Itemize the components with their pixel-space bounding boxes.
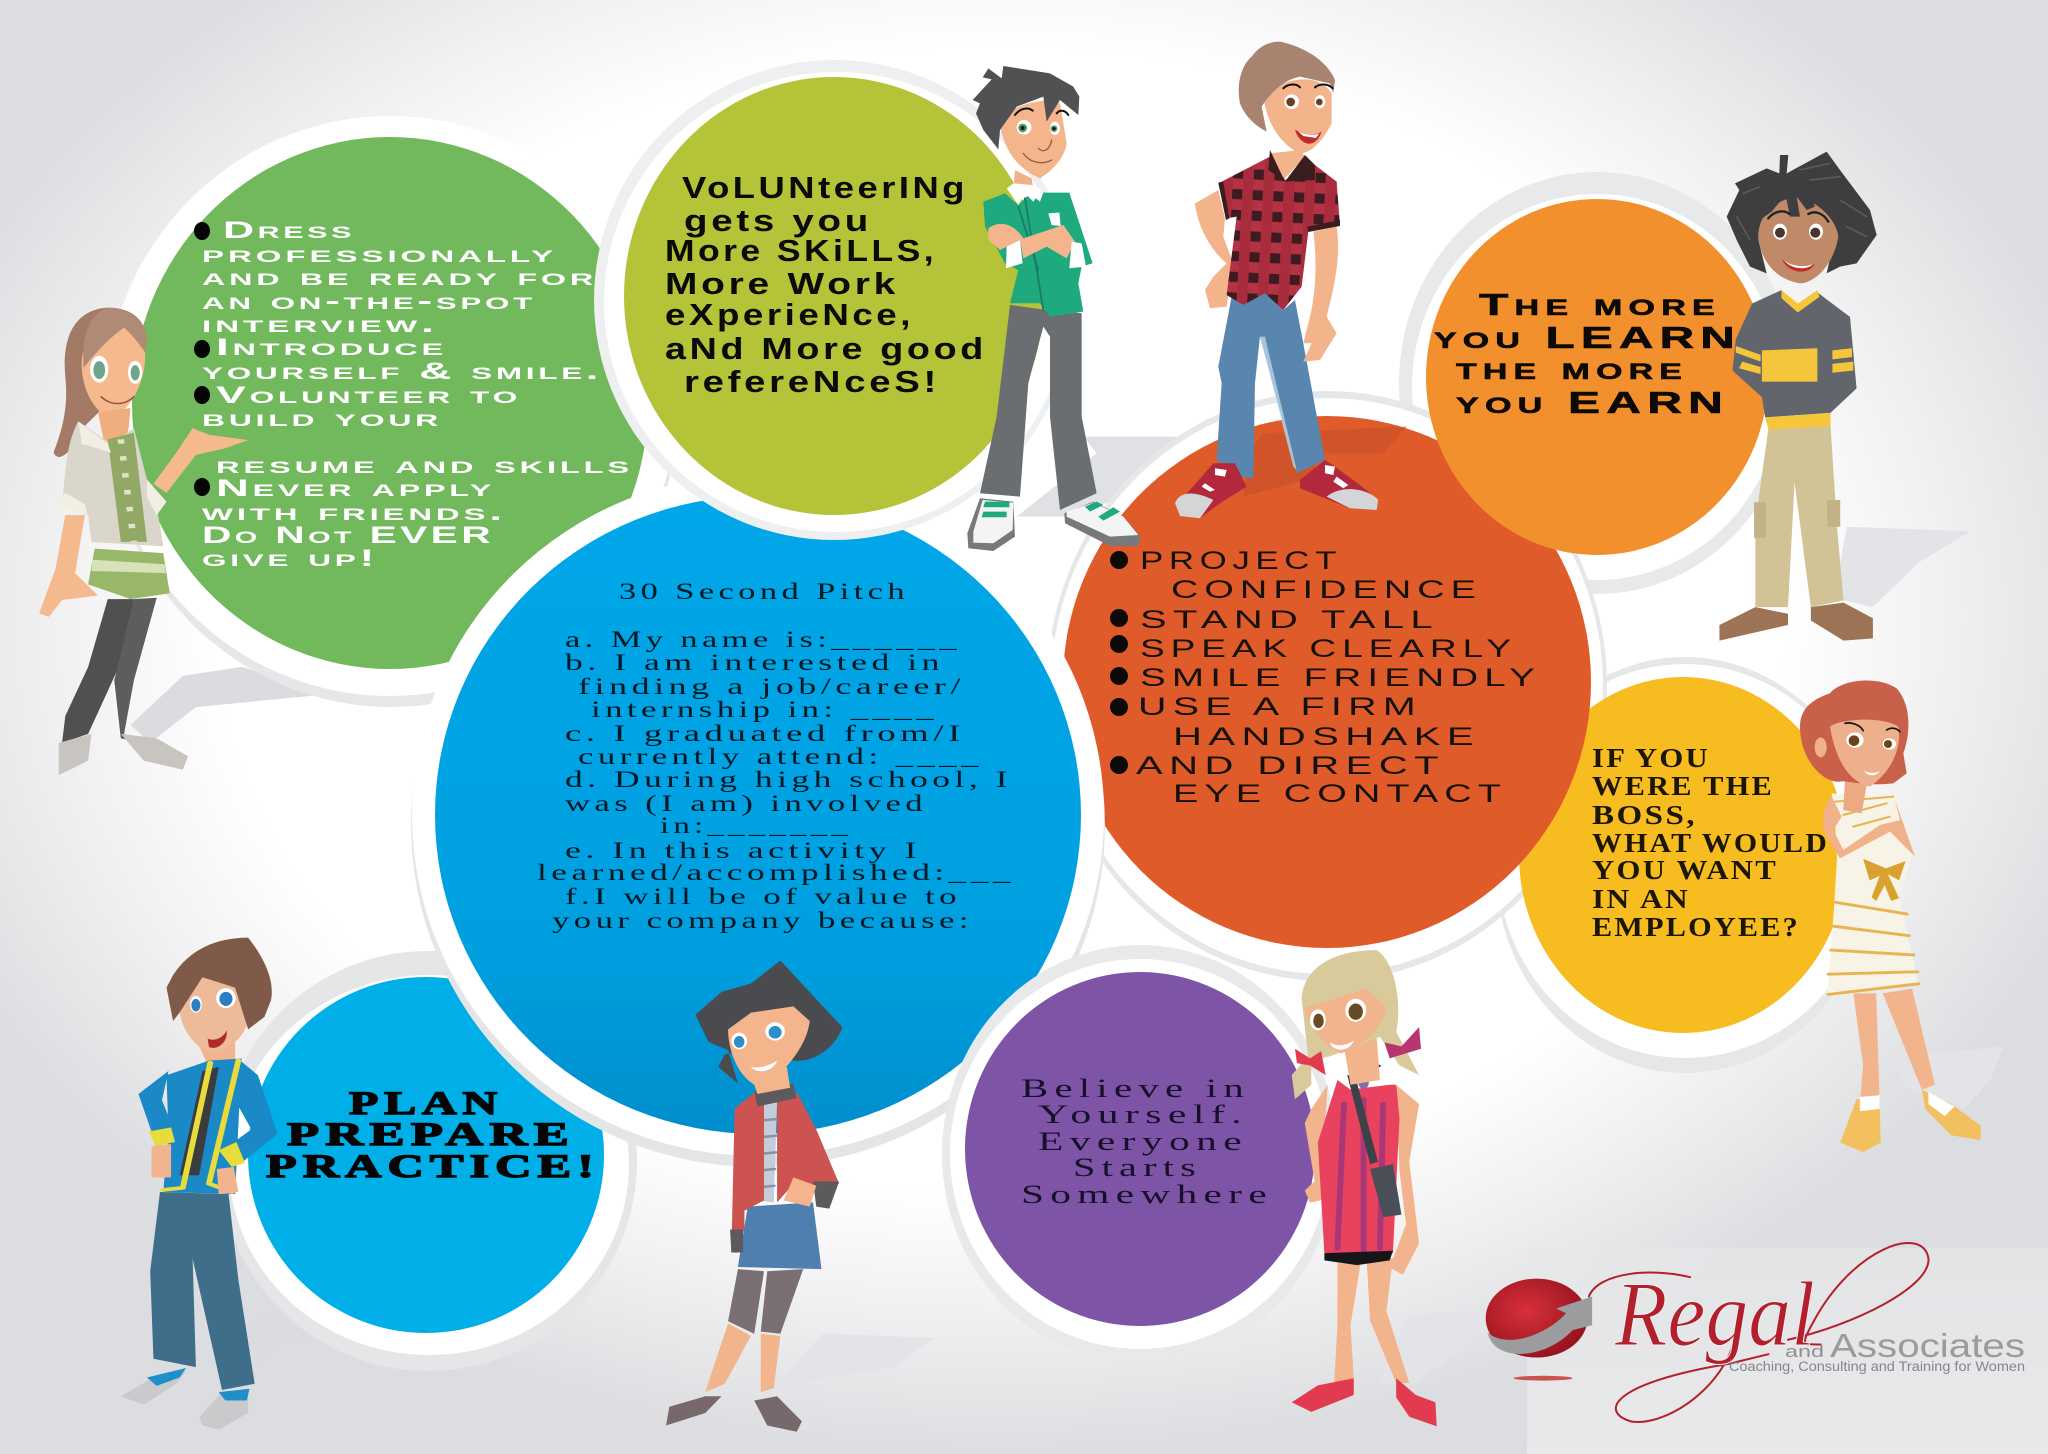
panel: green interview tips: Never apply	[216, 475, 495, 502]
panel: plan prepare practice: PREPARE	[287, 1117, 575, 1153]
panel: green interview tips	[105, 116, 677, 707]
panel: if you were the boss: IF YOU	[1592, 743, 1710, 773]
panel: 30 second pitch: a. My name is:______	[565, 627, 961, 653]
panel: if you were the boss: YOU WANT	[1592, 855, 1778, 885]
panel: green interview tips: professionally	[202, 241, 557, 268]
character: boy with blue jacket	[121, 938, 278, 1430]
halos behind yellow, orange-red and orange circles	[1047, 172, 1875, 1073]
character: dark-haired girl with red jacket	[666, 961, 842, 1432]
panel: orange-red presence tips: EYE CONTACT	[1173, 780, 1507, 808]
panel: if you were the boss: EMPLOYEE?	[1592, 912, 1800, 942]
panel: if you were the boss: WHAT WOULD	[1592, 828, 1829, 858]
panel: green interview tips: build your	[202, 405, 442, 432]
panel: volunteering: refereNceS!	[684, 364, 940, 399]
panel: green interview tips: and be ready for	[202, 264, 597, 291]
character: boy with plaid shirt	[1175, 42, 1378, 518]
logo: Regal and Associates: Regal	[1614, 1263, 1815, 1365]
panel: orange-red presence tips: AND DIRECT	[1136, 752, 1445, 780]
panel: volunteering: More SKiLLS,	[665, 233, 937, 268]
panel: green interview tips: resume and skills	[216, 452, 633, 479]
panel: green interview tips: an on-the-spot	[202, 288, 536, 315]
panel: 30 second pitch: c. I graduated from/I	[565, 721, 965, 747]
panel: orange-red presence tips	[1063, 416, 1591, 948]
panel: 30 second pitch: currently attend: ____	[578, 744, 983, 770]
panel: green interview tips: give up!	[202, 545, 378, 572]
panel: believe in yourself: Believe in	[1021, 1074, 1250, 1103]
panel: 30 second pitch	[411, 474, 1105, 1167]
panel: the more you learn	[1426, 199, 1768, 555]
panel: 30 second pitch: finding a job/career/	[578, 674, 965, 700]
panel: the more you learn: The more	[1479, 287, 1721, 322]
panel: the more you learn: you EARN	[1456, 385, 1729, 420]
panel: volunteering	[594, 60, 1074, 540]
panel: 30 second pitch: learned/accomplished:___	[537, 860, 1015, 886]
logo: Regal and Associates: Coaching, Consulting and Training for Women	[1729, 1359, 2025, 1374]
panel: 30 second pitch: 30 Second Pitch	[619, 579, 909, 605]
panel: orange-red presence tips: HANDSHAKE	[1173, 723, 1480, 751]
panel: volunteering: gets you	[684, 203, 872, 238]
panel: orange-red presence tips: CONFIDENCE	[1171, 576, 1482, 604]
panel: 30 second pitch: was (I am) involved	[565, 791, 927, 817]
panel: believe in yourself: Everyone	[1038, 1127, 1248, 1156]
panel: orange-red presence tips: SPEAK CLEARLY	[1140, 635, 1517, 663]
logo: Regal and Associates: Associates	[1830, 1327, 2025, 1364]
panel: 30 second pitch: e. In this activity I	[565, 838, 921, 864]
panel: orange-red presence tips: USE A FIRM	[1138, 693, 1422, 721]
panel: plan prepare practice: PLAN	[349, 1086, 503, 1122]
panel: green interview tips: Dress	[223, 217, 355, 244]
panel: plan prepare practice: PRACTICE!	[266, 1149, 600, 1185]
panel: believe in yourself: Starts	[1073, 1153, 1202, 1182]
panel: 30 second pitch: in:_______	[660, 813, 852, 839]
panel: believe in yourself	[942, 945, 1338, 1363]
panel: believe in yourself: Somewhere	[1021, 1180, 1273, 1209]
panel: believe in yourself: Yourself.	[1038, 1100, 1248, 1129]
ground shadows of characters	[131, 403, 2004, 1384]
panel: 30 second pitch: d. During high school, I	[565, 767, 1012, 793]
panel: if you were the boss: WERE THE	[1592, 771, 1774, 801]
panel: if you were the boss: IN AN	[1592, 884, 1690, 914]
character: boy with green shirt	[967, 66, 1141, 551]
panel: 30 second pitch: your company because:	[552, 908, 973, 934]
panel: orange-red presence tips: PROJECT	[1140, 547, 1342, 575]
panel: the more you learn: the more	[1456, 351, 1688, 386]
panel: green interview tips: Do Not EVER	[202, 522, 494, 549]
panel: orange-red presence tips: STAND TALL	[1140, 606, 1439, 634]
panel: if you were the boss	[1519, 677, 1847, 1033]
panel: 30 second pitch: f.I will be of value to	[565, 884, 961, 910]
panel: if you were the boss: BOSS,	[1592, 800, 1697, 830]
panel: green interview tips: yourself & smile.	[202, 358, 602, 385]
panel: volunteering: eXperieNce,	[665, 297, 914, 332]
panel: orange-red presence tips: SMILE FRIENDLY	[1140, 664, 1541, 692]
logo: Regal and Associates	[1486, 1243, 2048, 1454]
logo: Regal and Associates: and	[1785, 1342, 1824, 1361]
character: blonde girl	[1292, 950, 1437, 1426]
panel: green interview tips: with friends.	[202, 499, 506, 526]
character: girl presenting, left	[39, 308, 248, 775]
panel: 30 second pitch: b. I am interested in	[565, 650, 944, 676]
panel: 30 second pitch: internship in: ____	[591, 697, 938, 723]
panel: the more you learn: you LEARN	[1434, 320, 1741, 355]
panel: green interview tips: Volunteer to	[216, 382, 521, 409]
panel: volunteering: VoLUNteerINg	[682, 170, 968, 205]
panel: volunteering: More Work	[665, 266, 899, 301]
character: curly-haired boy	[1719, 152, 1877, 641]
panel: volunteering: aNd More good	[665, 331, 987, 366]
panel: green interview tips: Introduce	[216, 334, 447, 361]
character: red-haired girl	[1800, 680, 1981, 1152]
panel: plan prepare practice	[219, 951, 637, 1371]
panel: green interview tips: interview.	[202, 311, 438, 338]
